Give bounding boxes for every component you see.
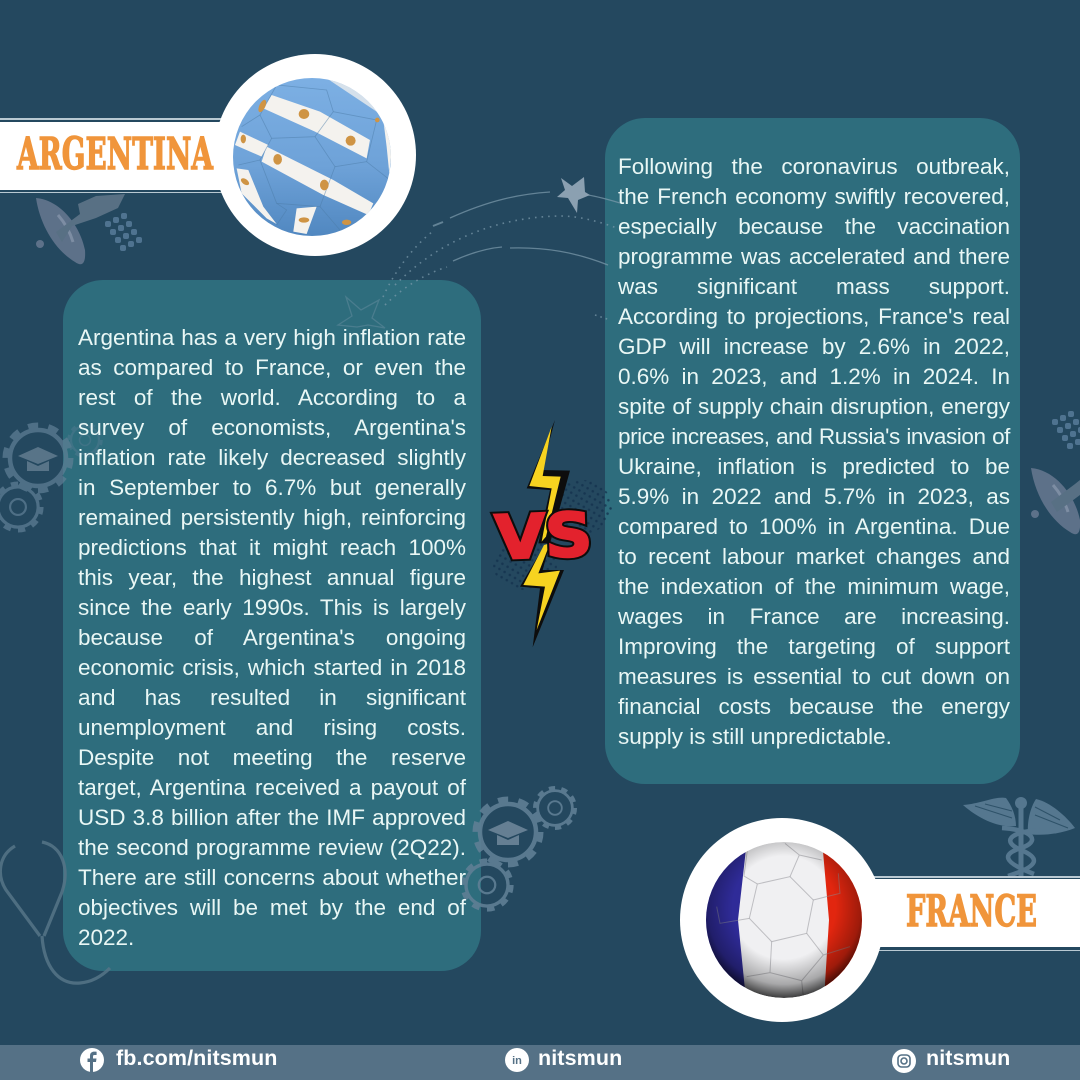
text: France paragraph: spite of supply chain disruption, energy bbox=[618, 394, 1010, 419]
text: France paragraph: GDP will increase by 2.6% in 2022, bbox=[618, 334, 1010, 359]
text: France paragraph bbox=[618, 154, 1010, 749]
text: France paragraph: 5.9% in 2022 and 5.7% in 2023, as bbox=[618, 484, 1010, 509]
icon: satellite right bbox=[1031, 411, 1080, 534]
text: France paragraph: Following the coronavirus outbreak, bbox=[618, 154, 1010, 179]
icon: stars and flight arcs bbox=[338, 192, 620, 328]
text: Argentina paragraph: objectives will be met by the end of bbox=[78, 895, 466, 920]
text: France paragraph: 0.6% in 2023, and 1.2% in 2024. In bbox=[618, 364, 1010, 389]
icon: VS lightning badge: VS bbox=[494, 500, 593, 574]
text: Argentina paragraph: as compared to France, or even the bbox=[78, 355, 466, 380]
text: Argentina paragraph: because of Argentina's ongoing bbox=[78, 625, 466, 650]
small outlined star bbox=[338, 297, 385, 328]
icon: stethoscope bbox=[0, 842, 110, 983]
header: Argentina band bbox=[0, 118, 222, 193]
text: Argentina paragraph: in September to 6.7% but generally bbox=[78, 475, 466, 500]
text: France paragraph: programme was accelerated and there bbox=[618, 244, 1010, 269]
icon: VS lightning badge bbox=[493, 420, 612, 647]
icon: satellite left bbox=[36, 194, 142, 264]
title: ARGENTINA: ARGENTINA bbox=[16, 129, 214, 180]
text: Argentina paragraph: and has resulted in significant bbox=[78, 685, 466, 710]
text: Argentina paragraph: predictions that it might reach 100% bbox=[78, 535, 466, 560]
text: France paragraph: was significant mass support. bbox=[618, 274, 1010, 299]
footer: instagram bbox=[892, 1046, 1010, 1073]
icon: gears left bbox=[0, 424, 101, 530]
footer: instagram: nitsmun bbox=[926, 1046, 1010, 1070]
icon: instagram bbox=[892, 1049, 916, 1073]
text: Argentina paragraph: economic crisis, which started in 2018 bbox=[78, 655, 466, 680]
text: France paragraph: supply is still unpredictable. bbox=[618, 724, 892, 749]
footer: facebook: fb.com/nitsmun bbox=[116, 1046, 277, 1070]
text: Argentina paragraph bbox=[78, 325, 466, 950]
header: France band bbox=[874, 876, 1080, 951]
icon: linkedin bbox=[505, 1048, 529, 1072]
icon: gears centre bbox=[463, 788, 575, 909]
text: Argentina paragraph: 2022. bbox=[78, 925, 134, 950]
text: France paragraph: financial costs because the energy bbox=[618, 694, 1010, 719]
footer: linkedin bbox=[505, 1046, 622, 1072]
text: Argentina paragraph: Despite not meeting the reserve bbox=[78, 745, 466, 770]
text: Argentina paragraph: this year, the highest annual figure bbox=[78, 565, 466, 590]
icon: facebook bbox=[80, 1048, 104, 1072]
text: Argentina paragraph: survey of economists, Argentina's bbox=[78, 415, 466, 440]
text: France paragraph: Improving the targeting of support bbox=[618, 634, 1010, 659]
icon: VS lightning badge: VS bbox=[494, 500, 593, 574]
text: France paragraph: to recent labour market changes and bbox=[618, 544, 1010, 569]
icon: Argentina football bbox=[214, 54, 416, 256]
text: Argentina paragraph: inflation rate likely decreased slightly bbox=[78, 445, 466, 470]
footer bar bbox=[0, 1045, 1080, 1080]
panel: Argentina text background bbox=[63, 280, 481, 971]
text: France paragraph: the French economy swiftly recovered, bbox=[618, 184, 1010, 209]
text: Argentina paragraph: since the early 1990s. This is largely bbox=[78, 595, 466, 620]
text: Argentina paragraph: rest of the world. According to a bbox=[78, 385, 466, 410]
text: France paragraph: especially because the vaccination bbox=[618, 214, 1010, 239]
icon: France football bbox=[680, 818, 884, 1022]
text: France paragraph: the indexation of the minimum wage, bbox=[618, 574, 1010, 599]
text: France paragraph: compared to 100% in Argentina. Due bbox=[618, 514, 1010, 539]
text: France paragraph: According to projections, France's real bbox=[618, 304, 1010, 329]
text: Argentina paragraph: Argentina has a very high inflation rate bbox=[78, 325, 466, 350]
icon: star bbox=[557, 177, 590, 213]
text: Argentina paragraph: unemployment and rising costs. bbox=[78, 715, 466, 740]
text: Argentina paragraph: There are still concerns about whether bbox=[78, 865, 466, 890]
text: Argentina paragraph: remained persistently high, reinforcing bbox=[78, 505, 466, 530]
panel: France text background bbox=[605, 118, 1020, 784]
text: France paragraph: price increases, and Russia's invasion of bbox=[618, 424, 1010, 449]
text: Argentina paragraph: target, Argentina received a payout of bbox=[78, 775, 466, 800]
footer: linkedin: nitsmun bbox=[538, 1046, 622, 1070]
text: France paragraph: measures is essential to cut down on bbox=[618, 664, 1010, 689]
text: France paragraph: Ukraine, inflation is predicted to be bbox=[618, 454, 1010, 479]
icon: linkedin: in bbox=[512, 1055, 522, 1067]
text: Argentina paragraph: USD 3.8 billion after the IMF approved bbox=[78, 805, 466, 830]
text: France paragraph: wages in France are increasing. bbox=[618, 604, 1010, 629]
text: Argentina paragraph: the second programme review (2Q22). bbox=[78, 835, 466, 860]
icon: caduceus bbox=[963, 797, 1075, 878]
